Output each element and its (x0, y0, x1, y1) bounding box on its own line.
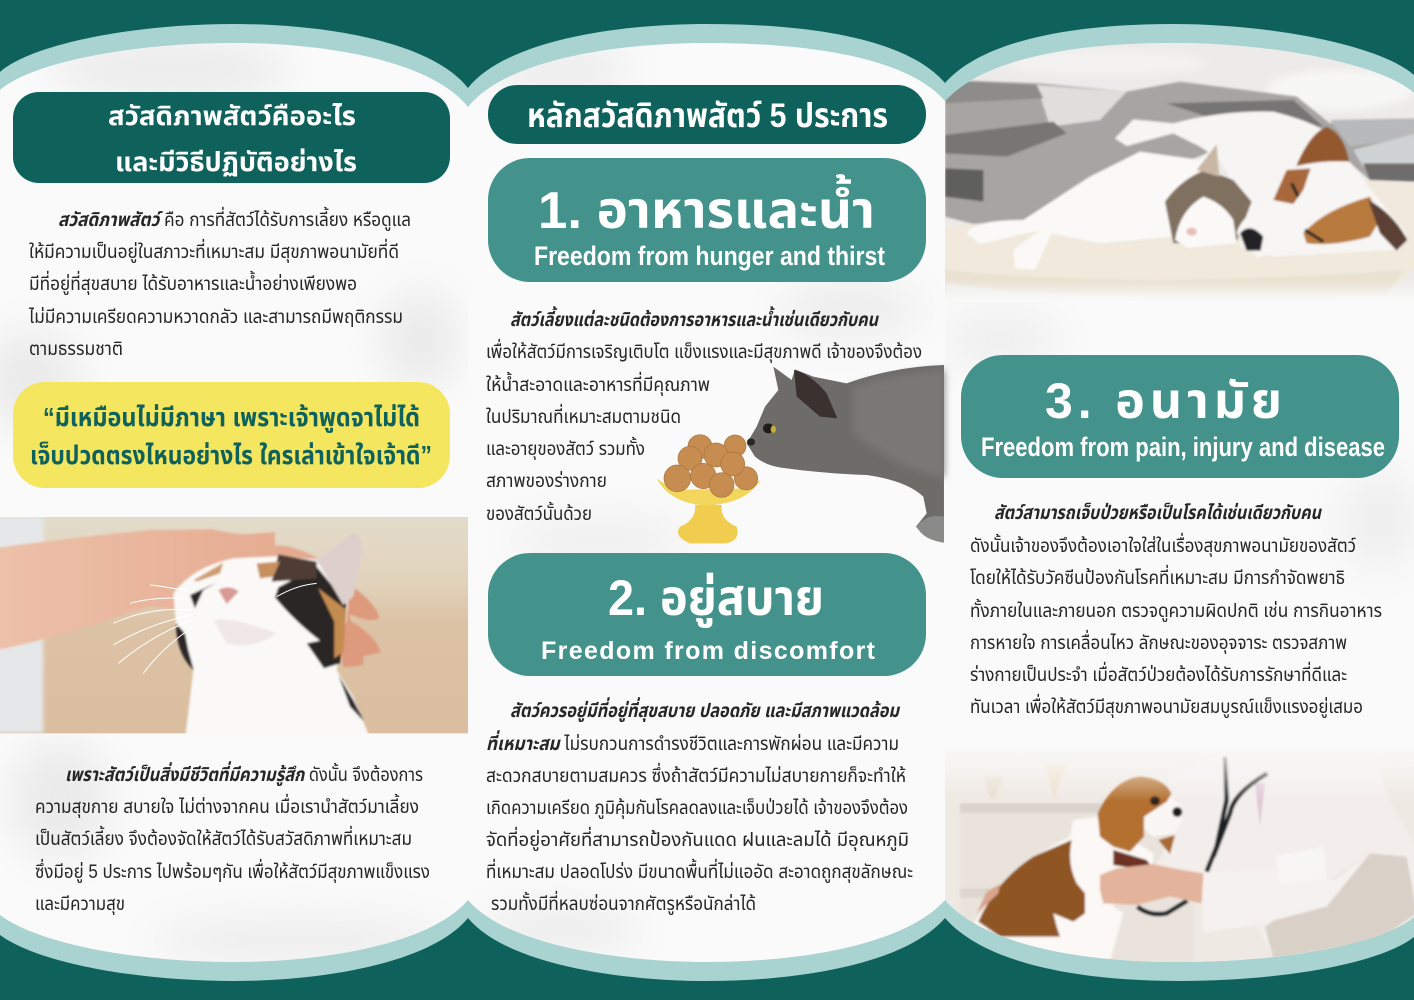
text block: comfort: สะดวกสบายตามสมควร ซึ่งถ้าสัตว์มีความไม่สบายกายก็จะทำให้ (486, 762, 906, 787)
arm (0, 529, 318, 651)
panel: freedom 1: 1. อาหารและน้ำ (538, 174, 875, 240)
text block: comfort (486, 697, 913, 916)
text block: why animal welfare: และมีความสุข (35, 894, 125, 915)
callout: yellow quote: “มีเหมือนไม่มีภาษา เพราะเจ้าพูดจาไม่ได้ (43, 402, 420, 433)
text block: food and water: ให้น้ำสะอาดและอาหารที่มีคุณภาพ (486, 371, 710, 396)
dog body (1115, 111, 1407, 257)
panel: freedom 3: 3. อนามัย (1045, 373, 1282, 429)
text block: definition: ให้มีความเป็นอยู่ในสภาวะที่เหมาะสม มีสุขภาพอนามัยที่ดี (29, 238, 399, 264)
photo: vet examining dog (945, 756, 1414, 962)
panel: center (468, 0, 945, 1000)
text block: comfort: ที่เหมาะสม ไม่รบกวนการดำรงชีวิตและการพักผ่อน และมีความ (486, 730, 899, 755)
photo: food in yellow bowl (657, 435, 761, 543)
text block: comfort: สัตว์ควรอยู่มีที่อยู่ที่สุขสบาย ปลอดภัย และมีสภาพแวดล้อม (510, 697, 900, 723)
cat fur (173, 556, 371, 740)
dog head (1236, 206, 1406, 258)
text block: why animal welfare: ซึ่งมีอยู่ 5 ประการ ไปพร้อมๆกัน เพื่อให้สัตว์มีสุขภาพแข็งแรง (35, 858, 430, 884)
text block: comfort: เกิดความเครียด ภูมิคุ้มกันโรคลดลงและเจ็บป่วยได้ เจ้าของจึงต้อง (486, 796, 908, 820)
text block: food and water: สภาพของร่างกาย (486, 469, 607, 492)
text block: health (970, 502, 1382, 719)
photo: hand petting cat (0, 517, 477, 740)
text block: definition: สวัสดิภาพสัตว์ คือ การที่สัตว์ได้รับการเลี้ยง หรือดูแล (58, 206, 411, 232)
bed (946, 179, 1414, 284)
text block: health: ร่างกายเป็นประจำ เมื่อสัตว์ป่วยต้องได้รับการรักษาที่ดีและ (970, 661, 1347, 686)
panel: freedom 1: Freedom from hunger and thirst (534, 241, 885, 271)
text block: comfort: ที่เหมาะสม ปลอดโปร่ง มีขนาดพื้นที่ไม่แออัด สะอาดถูกสุขลักษณะ (486, 858, 913, 884)
panel: freedom 3 (961, 355, 1399, 478)
panel: right (940, 0, 1414, 1000)
text block: food and water: สัตว์เลี้ยงแต่ละชนิดต้องการอาหารและน้ำเช่นเดียวกับคน (510, 306, 879, 331)
photo: grey cat (747, 365, 944, 543)
hand (1100, 864, 1203, 905)
text block: definition: ตามธรรมชาติ (29, 339, 123, 360)
text block: food and water (486, 306, 922, 525)
coat (1156, 756, 1414, 938)
photo: sleeping cat and dog (945, 43, 1414, 297)
text block: health: ดังนั้นเจ้าของจึงต้องเอาใจใส่ในเรื่องสุขภาพอนามัยของสัตว์ (970, 532, 1356, 557)
text block: health: สัตว์สามารถเจ็บป่วยหรือเป็นโรคได้เช่นเดียวกับคน (994, 502, 1322, 524)
blanket (945, 80, 1414, 224)
cat body (967, 150, 1210, 270)
callout: yellow quote (13, 382, 450, 488)
heading: five freedoms: หลักสวัสดิภาพสัตว์ 5 ประการ (527, 97, 888, 135)
panel: freedom 2: 2. อยู่สบาย (608, 570, 824, 628)
panel: left (0, 0, 468, 1000)
stethoscope (1137, 757, 1267, 914)
text block: comfort: จัดที่อยู่อาศัยที่สามารถป้องกันแดด ฝนและลมได้ มีอุณหภูมิ (486, 826, 909, 852)
right fingers (340, 585, 381, 667)
heading: what is animal welfare: สวัสดิภาพสัตว์คืออะไร (108, 101, 356, 131)
heading: five freedoms (488, 85, 926, 144)
text block: health: ทั้งภายในและภายนอก ตรวจดูความผิดปกติ เช่น การกินอาหาร (970, 598, 1382, 623)
text block: definition: ไม่มีความเครียดความหวาดกลัว และสามารถมีพฤติกรรม (28, 305, 403, 328)
text block: health: การหายใจ การเคลื่อนไหว ลักษณะของอุจจาระ ตรวจสภาพ (970, 629, 1347, 654)
text block: definition: มีที่อยู่ที่สุขสบาย ได้รับอาหารและน้ำอย่างเพียงพอ (29, 270, 357, 296)
text block: food and water: ของสัตว์นั้นด้วย (486, 501, 592, 525)
text block: food and water: ในปริมาณที่เหมาะสมตามชนิด (486, 403, 681, 428)
text block: why animal welfare: เพราะสัตว์เป็นสิ่งมีชีวิตที่มีความรู้สึก ดังนั้น จึงต้องการ (65, 761, 423, 787)
dog (972, 817, 1153, 962)
text block: food and water: และอายุของสัตว์ รวมทั้ง (486, 436, 645, 460)
panel: freedom 1 (488, 158, 926, 282)
heading: what is animal welfare (13, 92, 450, 183)
whiskers (113, 583, 317, 673)
text block: why animal welfare: เป็นสัตว์เลี้ยง จึงต้องจัดให้สัตว์ได้รับสวัสดิภาพที่เหมาะสม (35, 825, 412, 850)
text block: comfort: รวมทั้งมีที่หลบซ่อนจากศัตรูหรือนักล่าได้ (491, 890, 756, 916)
text block: why animal welfare (35, 761, 430, 915)
panel: freedom 2: Freedom from discomfort (541, 637, 876, 665)
text block: definition (28, 206, 411, 360)
text block: health: ทันเวลา เพื่อให้สัตว์มีสุขภาพอนามัยสมบูรณ์แข็งแรงอยู่เสมอ (970, 693, 1363, 719)
text block: why animal welfare: ความสุขกาย สบายใจ ไม่ต่างจากคน เมื่อเรานำสัตว์มาเลี้ยง (35, 793, 419, 818)
panel: freedom 2 (488, 553, 926, 676)
text block: health: โดยให้ได้รับวัคซีนป้องกันโรคที่เหมาะสม มีการกำจัดพยาธิ (970, 564, 1345, 589)
text block: food and water: เพื่อให้สัตว์มีการเจริญเติบโต แข็งแรงและมีสุขภาพดี เจ้าของจึงต้อง (486, 338, 922, 363)
heading: what is animal welfare: และมีวิธีปฏิบัติอย่างไร (115, 147, 357, 177)
callout: yellow quote: เจ็บปวดตรงไหนอย่างไร ใครเล่าเข้าใจเจ้าดี” (30, 440, 432, 470)
